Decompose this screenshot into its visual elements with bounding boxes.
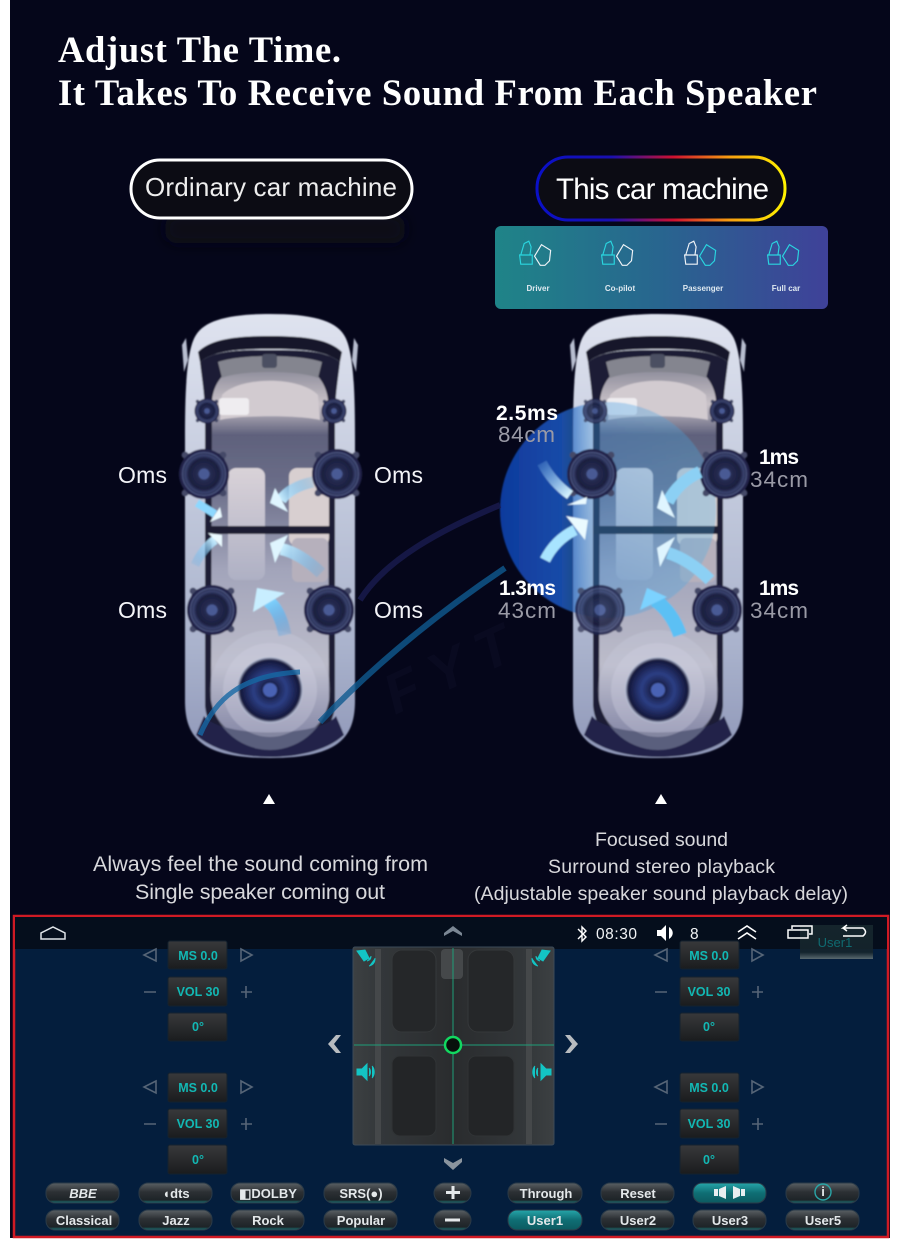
controls: front right: MS 0.0 bbox=[689, 949, 729, 963]
panel: this car machine badge bbox=[537, 157, 785, 220]
controls: front left: 0° bbox=[192, 1020, 204, 1034]
controls: front right: 0° bbox=[703, 1020, 715, 1034]
clock: 08:30 bbox=[596, 926, 637, 943]
preset buttons row one: ◧DOLBY bbox=[239, 1186, 297, 1201]
label: driver: Driver bbox=[526, 284, 550, 293]
label: co-pilot: Co-pilot bbox=[605, 284, 635, 293]
car illustration: ordinary bbox=[179, 314, 362, 758]
controls: rear right bbox=[655, 1073, 763, 1174]
text block: ordinary caption: Always feel the sound coming from bbox=[93, 852, 428, 876]
car illustration: this car machine bbox=[500, 314, 750, 758]
volume value: 8 bbox=[690, 926, 699, 943]
icon: speaker front right bbox=[532, 950, 550, 966]
preset buttons row two bbox=[46, 1210, 859, 1230]
preset buttons row two: User2 bbox=[620, 1213, 656, 1228]
blue focus circle bbox=[500, 402, 716, 618]
delay labels: this car machine: 34cm bbox=[750, 467, 808, 492]
icon: recents bbox=[788, 926, 812, 938]
title bbox=[58, 29, 817, 113]
preset buttons row one: Reset bbox=[620, 1186, 656, 1201]
watermark swoosh bbox=[200, 505, 534, 735]
panel: ordinary car machine badge: Ordinary car machine bbox=[145, 172, 397, 202]
preset buttons row one bbox=[46, 1183, 859, 1203]
preset buttons row one: i bbox=[821, 1184, 825, 1199]
delay labels: ordinary: Oms bbox=[118, 597, 167, 623]
arrow: view right bbox=[565, 1035, 578, 1053]
preset buttons row two: Jazz bbox=[162, 1213, 190, 1228]
controls: rear right: 0° bbox=[703, 1153, 715, 1167]
text block: this car caption: Surround stereo playback bbox=[548, 856, 775, 878]
arrow: front left to cabin bbox=[197, 503, 222, 522]
arrow: subwoofer bbox=[640, 588, 680, 635]
icon: home bbox=[41, 927, 65, 939]
title: Adjust The Time. bbox=[58, 29, 341, 70]
icon: up chevron bbox=[444, 926, 462, 936]
panel: this car machine badge: This car machine bbox=[556, 173, 769, 206]
controls: rear left: VOL 30 bbox=[177, 1117, 219, 1131]
icon: back bbox=[843, 925, 866, 936]
text block: this car caption bbox=[474, 829, 848, 905]
status bar bbox=[15, 917, 887, 959]
controls: rear left bbox=[144, 1073, 252, 1174]
controls: rear left: MS 0.0 bbox=[178, 1081, 218, 1095]
arrow: front left long bbox=[542, 463, 587, 505]
controls: front left: MS 0.0 bbox=[178, 949, 218, 963]
delay labels: ordinary: Oms bbox=[118, 462, 167, 488]
delay labels: this car machine: 34cm bbox=[750, 598, 808, 623]
delay labels: this car machine bbox=[496, 402, 808, 623]
icon: full car seats bbox=[768, 241, 799, 265]
text block: this car caption: (Adjustable speaker sound playback delay) bbox=[474, 883, 848, 905]
panel: settings screen bbox=[14, 916, 888, 1237]
watermark swoosh: FYT bbox=[373, 606, 534, 726]
preset buttons row two: Popular bbox=[337, 1213, 385, 1228]
text block: this car caption: Focused sound bbox=[595, 829, 728, 851]
preset buttons row one: BBE bbox=[69, 1186, 97, 1201]
preset buttons row two: User1 bbox=[527, 1213, 563, 1228]
icon: speaker front left bbox=[357, 950, 375, 966]
icon: passenger seat bbox=[685, 241, 716, 265]
label: passenger: Passenger bbox=[683, 284, 723, 293]
preset buttons row two: Classical bbox=[56, 1213, 112, 1228]
arrow: right pointer bbox=[655, 794, 667, 804]
panel: ordinary car machine badge bbox=[131, 160, 412, 243]
delay labels: this car machine: 1ms bbox=[759, 577, 799, 600]
icon: co-pilot seat bbox=[602, 241, 633, 265]
arrow: rear left long bbox=[545, 516, 588, 560]
icon: double chevron bbox=[738, 926, 756, 939]
text block: ordinary caption: Single speaker coming out bbox=[135, 880, 385, 904]
controls: rear left: 0° bbox=[192, 1153, 204, 1167]
controls: front right: VOL 30 bbox=[688, 985, 730, 999]
arrow: left pointer bbox=[263, 794, 275, 804]
controls: rear right: VOL 30 bbox=[688, 1117, 730, 1131]
delay labels: this car machine: 84cm bbox=[498, 422, 555, 447]
delay labels: ordinary bbox=[118, 462, 423, 623]
arrow: rear right bbox=[657, 537, 710, 580]
icon: speaker rear left bbox=[357, 1064, 374, 1080]
icon: driver seat bbox=[520, 241, 551, 265]
delay labels: ordinary: Oms bbox=[374, 597, 423, 623]
delay labels: this car machine: 2.5ms bbox=[496, 402, 558, 425]
label: full car: Full car bbox=[772, 284, 800, 293]
controls: rear right: MS 0.0 bbox=[689, 1081, 729, 1095]
delay labels: ordinary: Oms bbox=[374, 462, 423, 488]
preset buttons row one: ◖dts bbox=[162, 1186, 190, 1201]
preset buttons row two: User5 bbox=[805, 1213, 841, 1228]
controls: front right bbox=[655, 941, 763, 1041]
arrow: front right to cabin bbox=[270, 482, 313, 512]
delay labels: this car machine: 1ms bbox=[759, 446, 799, 469]
delay labels: this car machine: 43cm bbox=[498, 598, 556, 623]
preset buttons row two: Rock bbox=[252, 1213, 285, 1228]
icon: speaker rear right bbox=[533, 1064, 551, 1080]
arrow: front right bbox=[657, 472, 700, 518]
title: It Takes To Receive Sound From Each Speaker bbox=[58, 72, 817, 113]
delay labels: this car machine: 1.3ms bbox=[499, 577, 556, 600]
preset buttons row one: Through bbox=[520, 1186, 572, 1201]
ghost user tab bbox=[800, 925, 873, 959]
controls: front left bbox=[144, 941, 252, 1041]
icon: bluetooth bbox=[578, 927, 586, 941]
seat position view bbox=[353, 947, 554, 1145]
arrow: rear left to cabin bbox=[195, 533, 222, 565]
preset buttons row one: SRS(●) bbox=[339, 1186, 383, 1201]
preset buttons row two: User3 bbox=[712, 1213, 748, 1228]
icon: volume bbox=[657, 925, 673, 941]
panel: seat mode selector bbox=[495, 226, 828, 309]
arrow: subwoofer to cabin bbox=[253, 588, 285, 635]
text block: ordinary caption bbox=[93, 852, 428, 904]
arrow: rear right to cabin bbox=[270, 535, 321, 573]
arrow: view left bbox=[328, 1035, 341, 1053]
ghost user tab: User1 bbox=[818, 935, 852, 950]
controls: front left: VOL 30 bbox=[177, 985, 219, 999]
arrow: view down bbox=[444, 1158, 462, 1170]
selector ring bbox=[445, 1037, 461, 1053]
